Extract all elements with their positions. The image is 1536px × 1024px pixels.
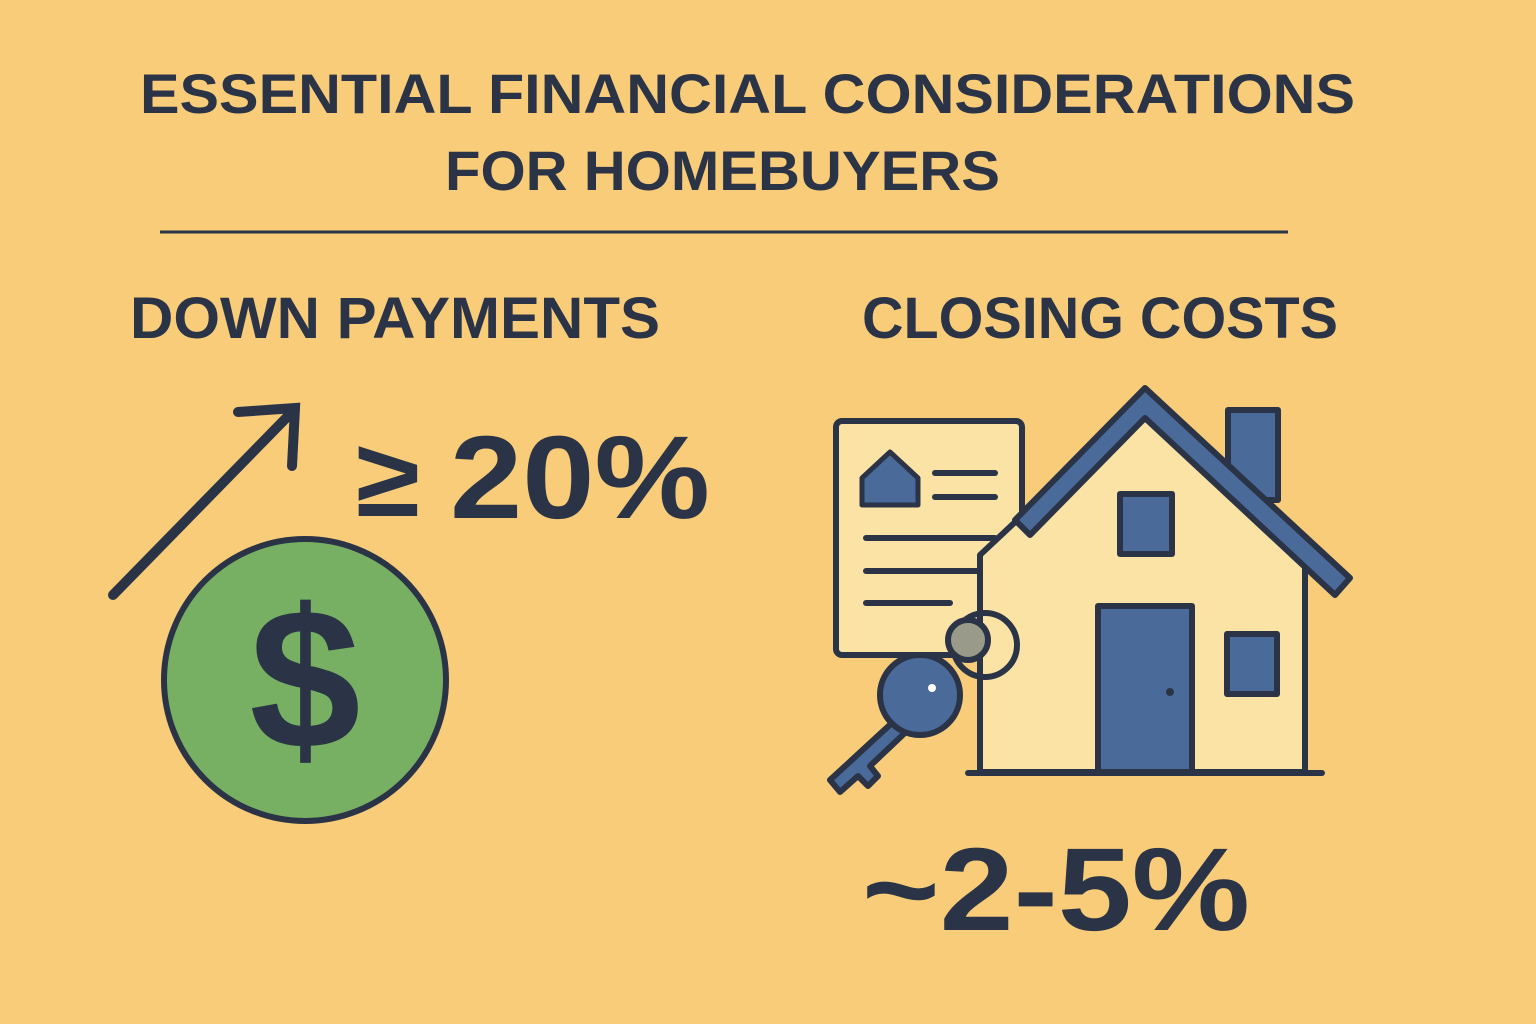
- icon: document: [836, 421, 1022, 655]
- stat: at least 20%: ≥: [356, 417, 420, 540]
- stat: closing cost range: ~2-5%: [862, 824, 1250, 956]
- heading: closing costs: CLOSING COSTS: [862, 286, 1338, 351]
- icon: key: [830, 613, 1017, 792]
- title: ESSENTIAL FINANCIAL CONSIDERATIONS: [140, 62, 1355, 125]
- title: [140, 62, 1355, 202]
- icon: dollar coin: [164, 539, 446, 821]
- stat: at least 20%: [356, 412, 710, 544]
- icon: dollar coin: $: [249, 568, 361, 791]
- stat: at least 20%: 20%: [450, 412, 710, 544]
- heading: down payments: DOWN PAYMENTS: [130, 286, 660, 351]
- icon: rising arrow: [113, 408, 295, 595]
- title: FOR HOMEBUYERS: [445, 139, 1000, 202]
- icon: house: [968, 388, 1350, 773]
